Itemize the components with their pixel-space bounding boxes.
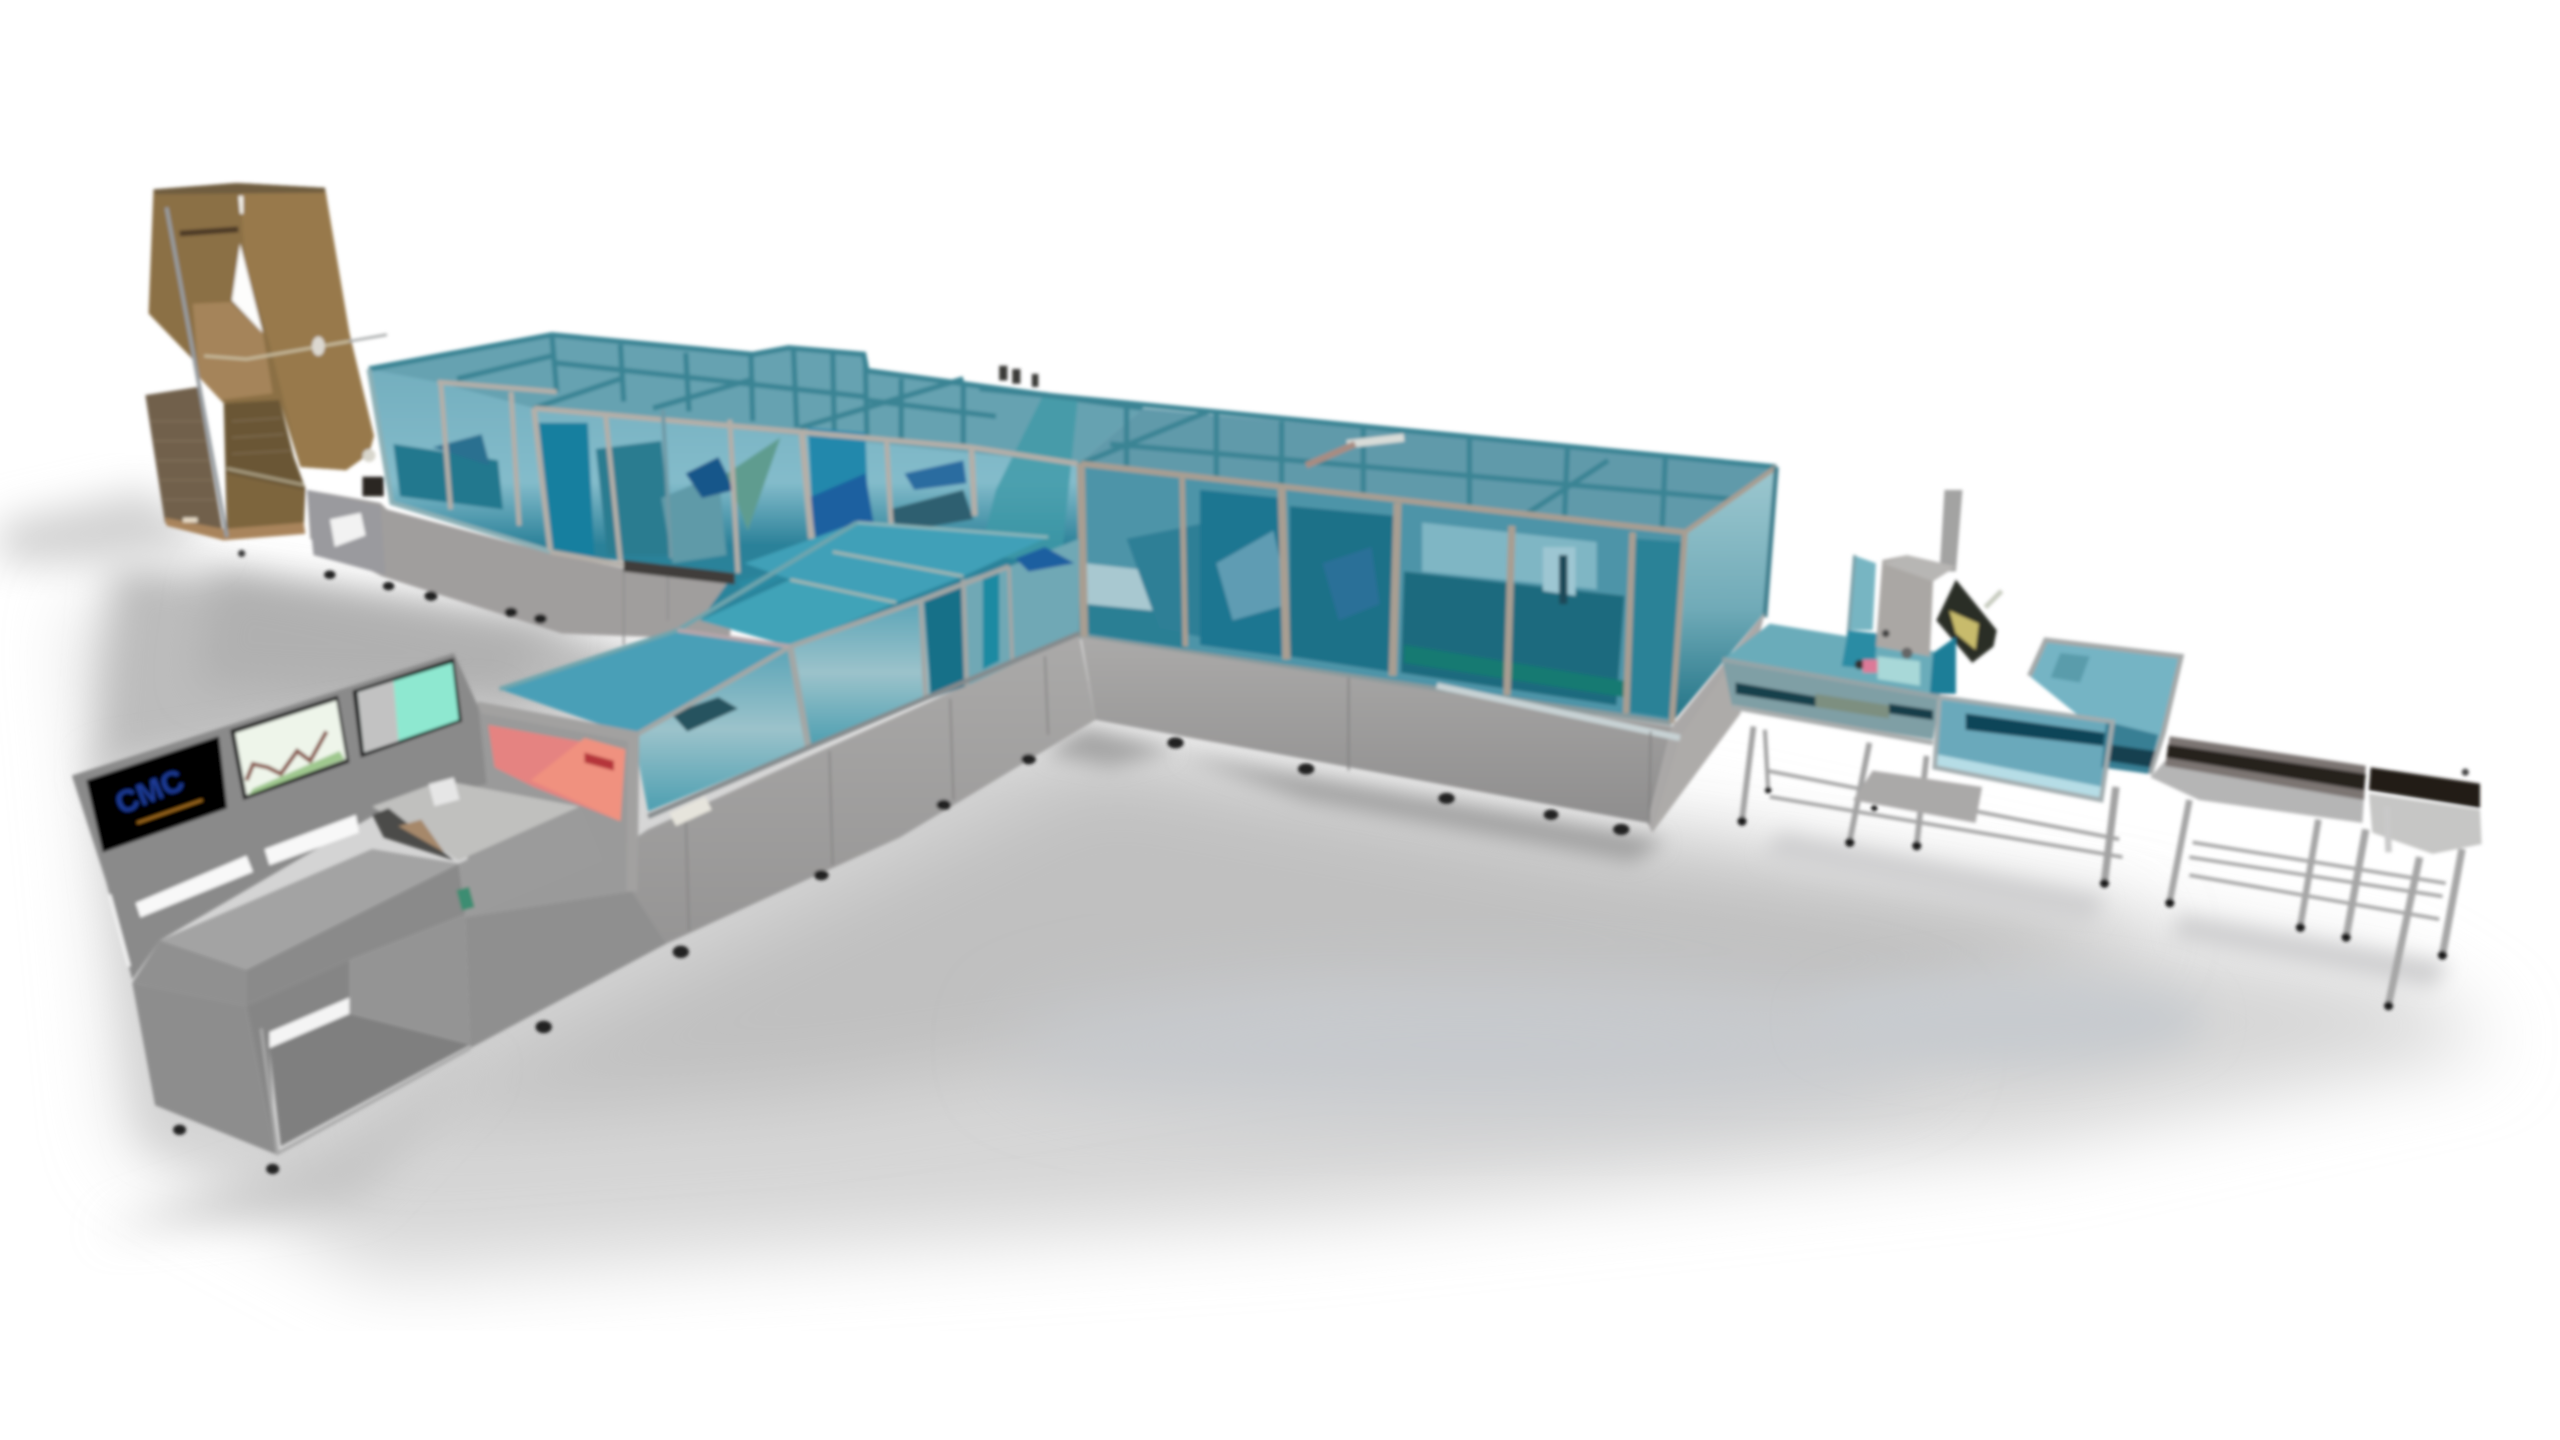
operator console [72,653,602,1154]
base notch shadow [624,560,735,584]
arm base cabinet [465,633,1096,1048]
green sensor [456,887,475,911]
leg frames [1742,727,2122,882]
parcel on conveyor [671,697,738,731]
label printer [1876,490,2002,694]
enclosure roof [369,335,1143,464]
main glass enclosure [980,389,1776,723]
frame posts [1081,464,1776,723]
hopper chute [149,183,374,470]
arm glass roof panels [744,522,1048,602]
white label strips [136,856,253,918]
monitor: CMC logo [87,736,227,852]
rear section base [307,490,735,645]
first belt legs and rails [2170,800,2446,926]
steel conveyor plate [372,780,580,860]
arm glass frame [500,522,1079,816]
main base cabinet [1081,612,1765,833]
stacked cardboard blanks [145,387,305,540]
hopper opening [232,196,263,333]
fold tool [372,808,454,860]
white label box [330,513,366,547]
rear glass enclosure [369,335,1143,686]
second belt [2369,793,2482,854]
packaging line scene [0,180,2483,1301]
roof bars [369,335,1143,449]
rear interior machinery [393,366,1078,563]
tunnel frame [477,707,633,891]
console lower cabinet [132,864,470,1154]
front glass panes [1081,464,1685,723]
main enclosure roof [1078,408,1776,532]
floor with soft shadows [0,478,2482,1301]
label applicator head [1936,580,1997,663]
console back panel [72,653,487,980]
white slot [269,998,349,1048]
conveyor glass [1722,624,1943,697]
enclosure back wall [369,335,1084,686]
machine feet [173,570,1629,1174]
back glass guard [2029,640,2181,774]
conveyor side [459,807,602,918]
cardboard magazine and hopper [145,183,387,557]
diagonal arm enclosure [465,522,1096,1048]
infeed conveyor with printer [1722,490,2181,888]
first belt [2150,761,2364,823]
red scanner tunnel [465,707,633,918]
front glass guard [1935,697,2113,800]
infeed roller [362,449,384,496]
arm front glass [633,647,808,811]
conveyor table [1722,660,1940,740]
outfeed conveyors [2150,736,2482,1010]
monitor: line layout [230,696,349,800]
second belt legs [2346,829,2462,1004]
support pole and belt [167,207,387,537]
desk top [160,849,459,970]
small label device [669,797,712,826]
monitor: CMC logo: CMC [110,762,189,821]
feet [2165,898,2447,1010]
feet [1737,787,2109,888]
side glass pane [1672,467,1776,723]
base box under printer [1853,771,1982,823]
rear front frame [369,369,1078,573]
main interior machinery [1086,438,1682,718]
white side handle [109,895,129,967]
monitor: status screen [353,658,462,758]
